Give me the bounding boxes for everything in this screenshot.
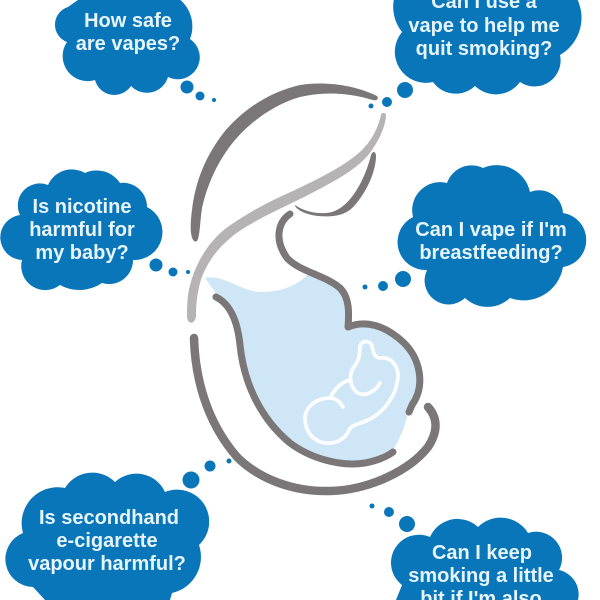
thought bubble: how safe: are vapes? <box>76 33 180 55</box>
thought bubble: how safe: How safe <box>84 10 172 32</box>
thought bubble: quit smoking: quit smoking? <box>416 38 552 60</box>
thought bubble: nicotine <box>0 169 190 290</box>
thought bubble: secondhand vapour <box>5 458 232 600</box>
thought bubble: breastfeeding: Can I vape if I'm <box>415 219 567 241</box>
illustration: pregnant woman silhouette <box>187 83 436 491</box>
thought bubble: secondhand vapour: vapour harmful? <box>28 553 186 575</box>
inner body line <box>216 297 393 464</box>
hair outline <box>191 83 378 242</box>
thought bubble: breastfeeding: breastfeeding? <box>419 242 563 264</box>
icon: baby outline <box>305 342 398 443</box>
light grey back line <box>187 113 386 323</box>
thought bubble: secondhand vapour: Is secondhand <box>39 507 179 529</box>
thought bubble: keep smoking: Can I keep <box>432 542 532 564</box>
neck and belly line <box>279 214 420 412</box>
thought bubble: quit smoking: vape to help me <box>408 15 560 37</box>
thought bubble: nicotine: my baby? <box>35 242 129 264</box>
thought bubble: breastfeeding <box>362 165 586 307</box>
belly fill <box>205 274 420 463</box>
thought bubble: quit smoking <box>368 0 582 108</box>
thought bubble: secondhand vapour: e-cigarette <box>56 530 158 552</box>
thought bubble: keep smoking: smoking a little <box>408 565 554 587</box>
thought bubble: nicotine: Is nicotine <box>33 196 131 218</box>
outer body line <box>194 338 436 491</box>
thought bubble: how safe <box>55 0 216 102</box>
thought bubble: nicotine: harmful for <box>29 219 135 241</box>
thought bubble: keep smoking <box>370 504 579 600</box>
chin line <box>295 152 376 216</box>
